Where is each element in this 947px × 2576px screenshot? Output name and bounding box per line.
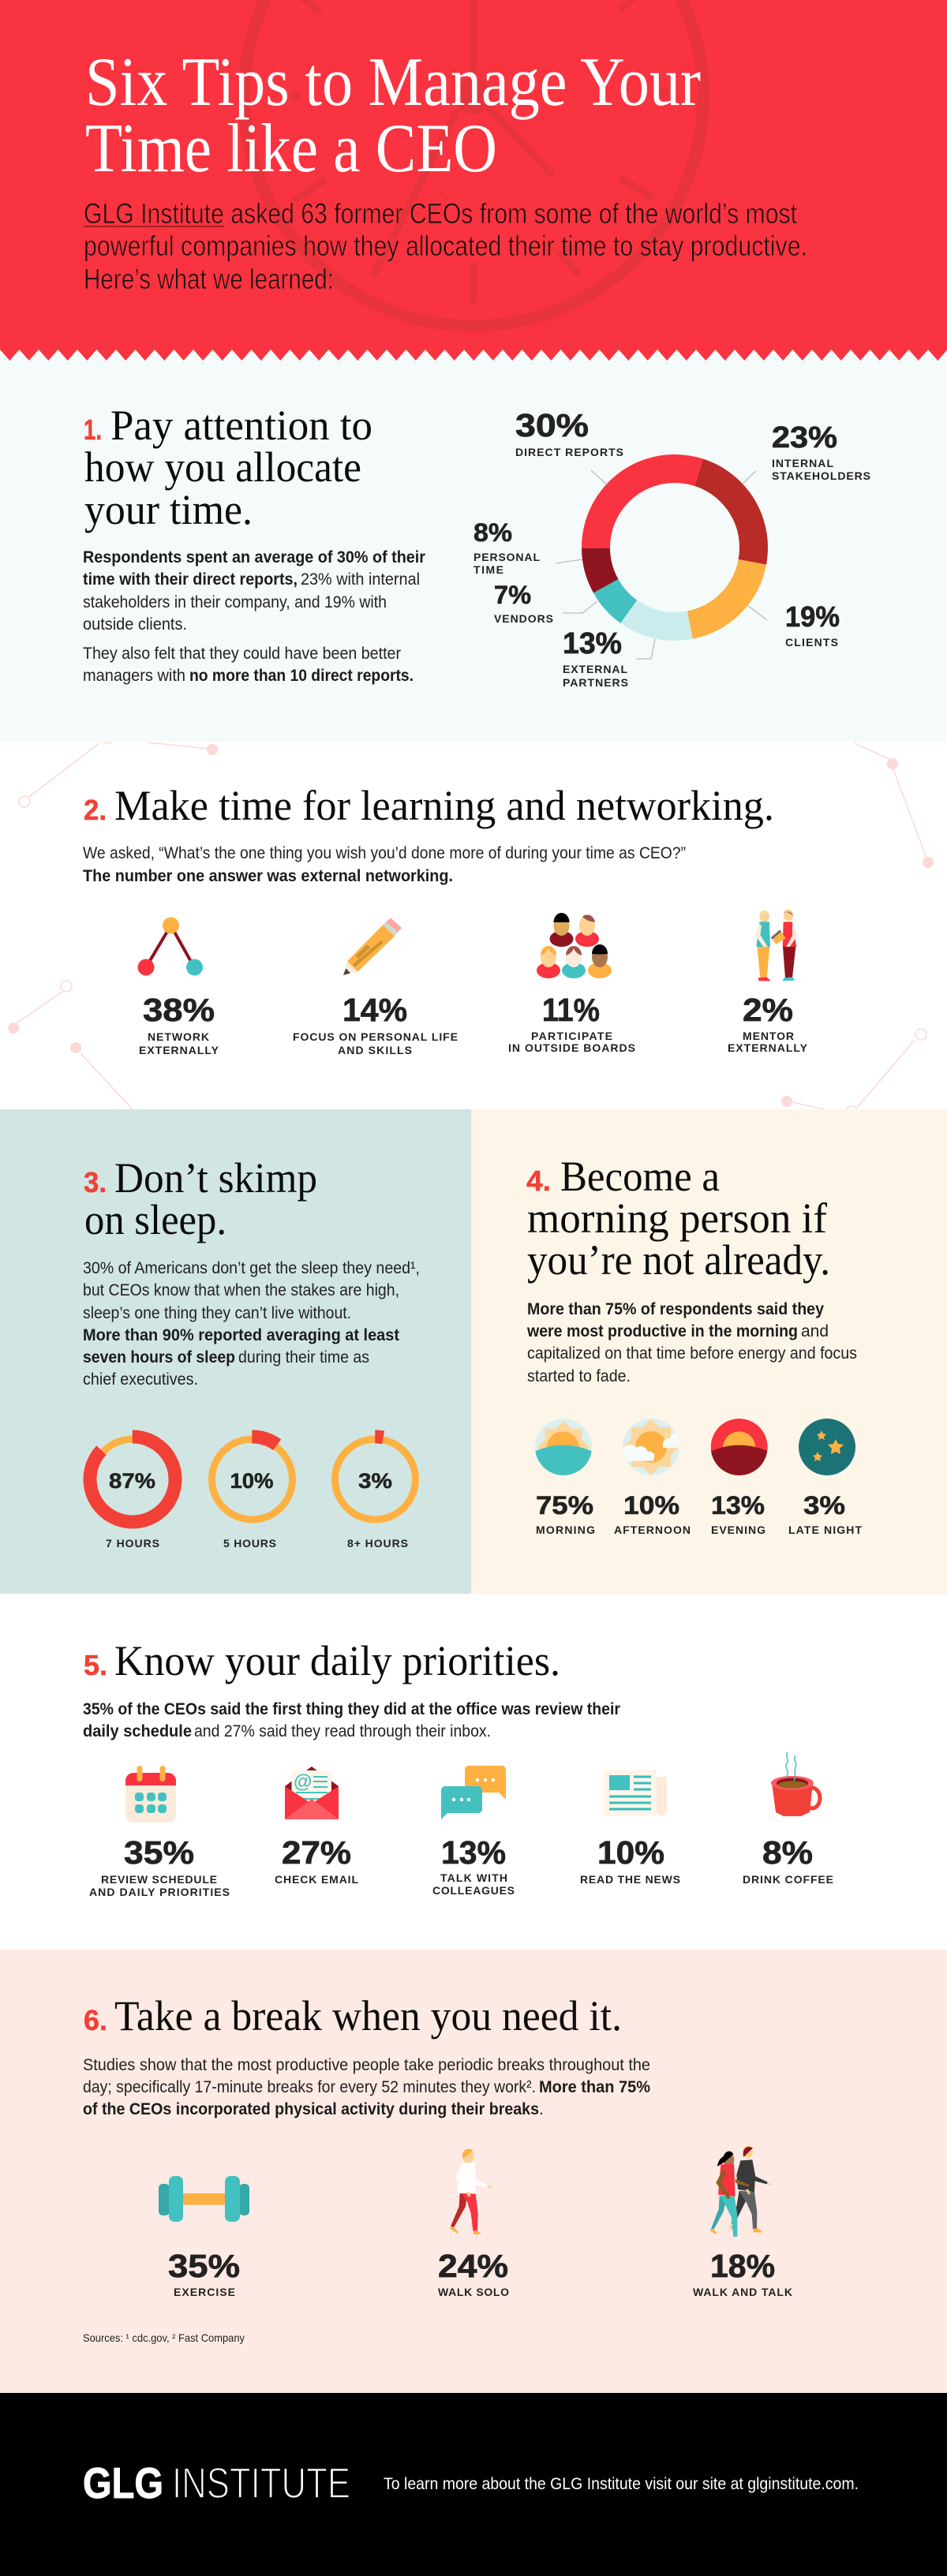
body text: chief executives. xyxy=(83,1370,198,1389)
icon: dumbbell xyxy=(159,2176,249,2222)
heading 5: 5. xyxy=(84,1649,107,1681)
logo: GLG Institute: INSTITUTE xyxy=(172,2458,350,2507)
stat: walk solo xyxy=(438,2149,509,2298)
stat: network externally xyxy=(137,917,219,1056)
stat: late night: LATE NIGHT xyxy=(788,1524,862,1536)
body text: started to fade. xyxy=(527,1367,631,1385)
body text: and 27% said they read through their inbox. xyxy=(194,1722,491,1740)
panel: section 4 morning person xyxy=(471,1109,947,1594)
stat: walk and talk: WALK AND TALK xyxy=(693,2286,792,2298)
heading 3: 3. xyxy=(84,1166,107,1198)
stat: exercise: EXERCISE xyxy=(174,2286,235,2298)
heading 5: Know your daily priorities. xyxy=(114,1637,560,1684)
body text: sleep’s one thing they can’t live without. xyxy=(83,1304,351,1322)
body text: . xyxy=(539,2100,544,2118)
heading 4: you’re not already. xyxy=(527,1236,830,1284)
ring chart: 8+ hours 3% xyxy=(333,1437,418,1550)
stat: read the news: READ THE NEWS xyxy=(580,1873,680,1886)
ring chart: 7 hours 87%: 7 HOURS xyxy=(106,1537,159,1550)
body text: They also felt that they could have been better xyxy=(83,645,401,663)
body text: during their time as xyxy=(238,1348,369,1367)
heading 4: Become a xyxy=(560,1153,720,1200)
body text: Respondents spent an average of 30% of their xyxy=(83,548,425,566)
icon: evening sunset xyxy=(710,1419,768,1475)
label: personal time xyxy=(474,518,540,576)
icon: calendar xyxy=(125,1766,176,1823)
stat: late night xyxy=(788,1419,862,1536)
body text: outside clients. xyxy=(83,615,187,634)
stat: evening xyxy=(710,1419,768,1534)
body text: managers with xyxy=(83,667,185,685)
title: Six Tips to Manage Your xyxy=(85,44,701,121)
label: clients: CLIENTS xyxy=(785,636,838,649)
heading 2: 2. xyxy=(84,794,107,826)
body text: 23% with internal xyxy=(301,570,420,589)
panel: section 3 sleep xyxy=(0,1109,471,1594)
label: direct reports xyxy=(515,407,623,458)
body text: More than 90% reported averaging at least xyxy=(83,1326,399,1344)
body text: More than 75% of respondents said they xyxy=(527,1300,824,1318)
intro text xyxy=(84,197,807,295)
heading 2: Make time for learning and networking. xyxy=(114,782,774,829)
icon: morning sun xyxy=(535,1419,592,1475)
heading 4: 4. xyxy=(526,1165,551,1197)
stat: check email xyxy=(275,1767,358,1886)
stat: walk and talk: 18% xyxy=(710,2248,775,2284)
stat: exercise: 35% xyxy=(168,2248,240,2284)
sources: Sources: ¹ cdc.gov, ² Fast Company xyxy=(83,2331,245,2344)
stat: review schedule: AND DAILY PRIORITIES xyxy=(89,1886,230,1898)
body text: no more than 10 direct reports. xyxy=(189,667,414,685)
stat: walk solo: WALK SOLO xyxy=(438,2286,509,2298)
body text: We asked, “What’s the one thing you wish you’d done more of during your time as CEO?” xyxy=(83,844,686,862)
icon: two people with book xyxy=(755,910,798,981)
stat: late night: 3% xyxy=(803,1491,845,1520)
label: clients xyxy=(785,600,840,649)
stat: morning: 75% xyxy=(536,1491,593,1520)
stat: review schedule: REVIEW SCHEDULE xyxy=(101,1873,217,1886)
icon: speech bubbles xyxy=(441,1766,506,1819)
stat: evening: 13% xyxy=(711,1491,765,1520)
heading 4 xyxy=(526,1153,830,1284)
heading 3 xyxy=(84,1154,317,1243)
stat: morning xyxy=(531,1419,596,1536)
body text: More than 75% xyxy=(539,2078,650,2096)
stat: evening: EVENING xyxy=(711,1524,765,1536)
body text: seven hours of sleep xyxy=(83,1348,235,1367)
label: vendors: VENDORS xyxy=(494,612,553,625)
body text: of the CEOs incorporated physical activity during their breaks xyxy=(83,2100,539,2118)
stat: participate in outside boards: 11% xyxy=(542,992,600,1028)
panel: footer xyxy=(0,2393,947,2576)
icon: night stars xyxy=(799,1419,855,1475)
stat: network externally: NETWORK xyxy=(148,1030,209,1043)
ring chart: 5 hours 10% xyxy=(210,1437,295,1550)
icon: two people walking xyxy=(709,2145,773,2237)
icon: newspaper xyxy=(604,1770,667,1816)
icon: group of people xyxy=(537,913,612,978)
stat: participate in outside boards: PARTICIPATE xyxy=(531,1030,612,1042)
intro text: GLG Institute asked 63 former CEOs from some of the world’s most xyxy=(84,197,797,230)
ring chart: 8+ hours 3%: 3% xyxy=(358,1469,392,1493)
body text xyxy=(526,1300,857,1385)
stat: read the news xyxy=(580,1770,680,1886)
label: internal stakeholders: INTERNAL xyxy=(772,457,833,469)
heading 6: 6. xyxy=(84,2004,107,2036)
heading 1: your time. xyxy=(84,486,253,533)
stat: drink coffee: 8% xyxy=(762,1834,813,1871)
title: Time like a CEO xyxy=(85,110,497,187)
stat: drink coffee xyxy=(743,1752,833,1886)
label: external partners: PARTNERS xyxy=(563,676,628,689)
icon: afternoon sun and clouds xyxy=(622,1419,683,1475)
label: vendors xyxy=(494,581,553,625)
body text: day; specifically 17-minute breaks for every 52 minutes they work². xyxy=(83,2078,536,2096)
stat: focus on personal life xyxy=(293,918,458,1056)
stat: read the news: 10% xyxy=(597,1834,664,1871)
heading 1: how you allocate xyxy=(84,443,361,491)
label: personal time: PERSONAL xyxy=(474,551,540,563)
heading 1: Pay attention to xyxy=(110,402,372,449)
label: vendors: 7% xyxy=(494,581,531,609)
ring chart: 7 hours 87%: 87% xyxy=(109,1469,155,1493)
icon: pencil xyxy=(343,918,402,975)
heading 6: Take a break when you need it. xyxy=(114,1992,622,2039)
label: internal stakeholders: STAKEHOLDERS xyxy=(772,469,870,482)
body text: The number one answer was external networking. xyxy=(83,867,453,885)
icon: person walking xyxy=(449,2149,493,2234)
heading 4: morning person if xyxy=(527,1195,827,1242)
stat: focus on personal life: 14% xyxy=(342,992,407,1028)
stat: exercise xyxy=(159,2176,249,2298)
label: external partners xyxy=(563,627,628,689)
body text xyxy=(83,2056,650,2118)
body text: Studies show that the most productive people take periodic breaks throughout the xyxy=(83,2056,650,2074)
body text: daily schedule xyxy=(83,1722,192,1740)
footer text: To learn more about the GLG Institute visit our site at glginstitute.com. xyxy=(384,2475,859,2493)
intro text: Here’s what we learned: xyxy=(84,263,334,295)
stat: review schedule: 35% xyxy=(124,1834,194,1871)
stat: walk solo: 24% xyxy=(438,2248,508,2284)
icon: coffee cup xyxy=(771,1752,820,1816)
icon: network nodes xyxy=(137,917,203,975)
panel: section 5 daily priorities xyxy=(0,1594,947,1950)
stat: focus on personal life: AND SKILLS xyxy=(338,1044,412,1056)
body text: and xyxy=(801,1322,829,1340)
icon: open envelope: @ xyxy=(294,1771,312,1793)
panel: section 6 take a break xyxy=(0,1950,947,2393)
stat: afternoon xyxy=(614,1419,691,1536)
stat: talk with colleagues: 13% xyxy=(441,1834,506,1871)
logo: GLG Institute xyxy=(83,2458,350,2507)
body text: 35% of the CEOs said the first thing they did at the office was review their xyxy=(83,1700,620,1718)
intro text: powerful companies how they allocated their time to stay productive. xyxy=(84,230,807,262)
stat: check email: 27% xyxy=(282,1834,351,1871)
label: internal stakeholders xyxy=(772,421,870,482)
stat: morning: MORNING xyxy=(536,1524,595,1536)
label: external partners: EXTERNAL xyxy=(563,663,627,675)
stat: review schedule xyxy=(89,1766,230,1898)
stat: network externally: EXTERNALLY xyxy=(139,1044,219,1056)
panel: header xyxy=(0,0,947,361)
heading 3: Don’t skimp xyxy=(114,1154,317,1202)
label: direct reports: 30% xyxy=(515,407,589,443)
stat: afternoon: 10% xyxy=(623,1491,679,1520)
icon: open envelope xyxy=(285,1767,339,1819)
stat: participate in outside boards: IN OUTSIDE BOARDS xyxy=(508,1041,635,1054)
stat: talk with colleagues: TALK WITH xyxy=(440,1871,507,1884)
panel: section 1 allocate time xyxy=(83,402,870,689)
body text: were most productive in the morning xyxy=(526,1322,798,1340)
stat: mentor externally: EXTERNALLY xyxy=(728,1041,808,1054)
stat: focus on personal life: FOCUS ON PERSONAL LIFE xyxy=(293,1030,458,1043)
stat: mentor externally: MENTOR xyxy=(743,1030,794,1042)
stat: talk with colleagues xyxy=(432,1766,515,1897)
heading 1: 1. xyxy=(84,413,102,446)
stat: drink coffee: DRINK COFFEE xyxy=(743,1873,833,1886)
donut chart xyxy=(474,407,870,689)
ring chart: 7 hours 87% xyxy=(90,1437,175,1550)
body text xyxy=(83,1259,420,1389)
label: external partners: 13% xyxy=(563,627,622,660)
stat: afternoon: AFTERNOON xyxy=(614,1524,691,1536)
stat: network externally: 38% xyxy=(143,992,215,1028)
title xyxy=(85,44,701,187)
label: direct reports: DIRECT REPORTS xyxy=(515,446,623,458)
stat: mentor externally: 2% xyxy=(743,992,793,1028)
ring chart: 8+ hours 3%: 8+ HOURS xyxy=(347,1537,408,1550)
label: internal stakeholders: 23% xyxy=(772,421,837,454)
label: personal time: TIME xyxy=(474,563,503,576)
icon: clock watermark xyxy=(244,0,703,326)
heading 3: on sleep. xyxy=(84,1196,226,1243)
label: clients: 19% xyxy=(785,600,840,633)
body text xyxy=(83,548,425,685)
stat: talk with colleagues: COLLEAGUES xyxy=(432,1884,515,1897)
stat: check email: CHECK EMAIL xyxy=(275,1873,358,1886)
stat: participate in outside boards xyxy=(508,913,635,1054)
body text xyxy=(83,844,686,885)
body text xyxy=(83,1700,620,1740)
body text: time with their direct reports, xyxy=(83,570,298,589)
body text: stakeholders in their company, and 19% with xyxy=(83,593,387,611)
stat: mentor externally xyxy=(728,910,808,1054)
body text: but CEOs know that when the stakes are high, xyxy=(83,1281,399,1299)
heading 1 xyxy=(84,402,372,533)
stat: walk and talk xyxy=(693,2145,792,2298)
label: personal time: 8% xyxy=(474,518,512,547)
logo: GLG Institute: GLG xyxy=(83,2458,163,2507)
body text: 30% of Americans don’t get the sleep they need¹, xyxy=(83,1259,420,1277)
panel: section 2 learning and networking xyxy=(0,732,947,1117)
panel: section 1 background xyxy=(0,347,947,742)
ring chart: 5 hours 10%: 5 HOURS xyxy=(223,1537,276,1550)
ring chart: 5 hours 10%: 10% xyxy=(230,1469,273,1493)
body text: capitalized on that time before energy and focus xyxy=(527,1344,857,1363)
